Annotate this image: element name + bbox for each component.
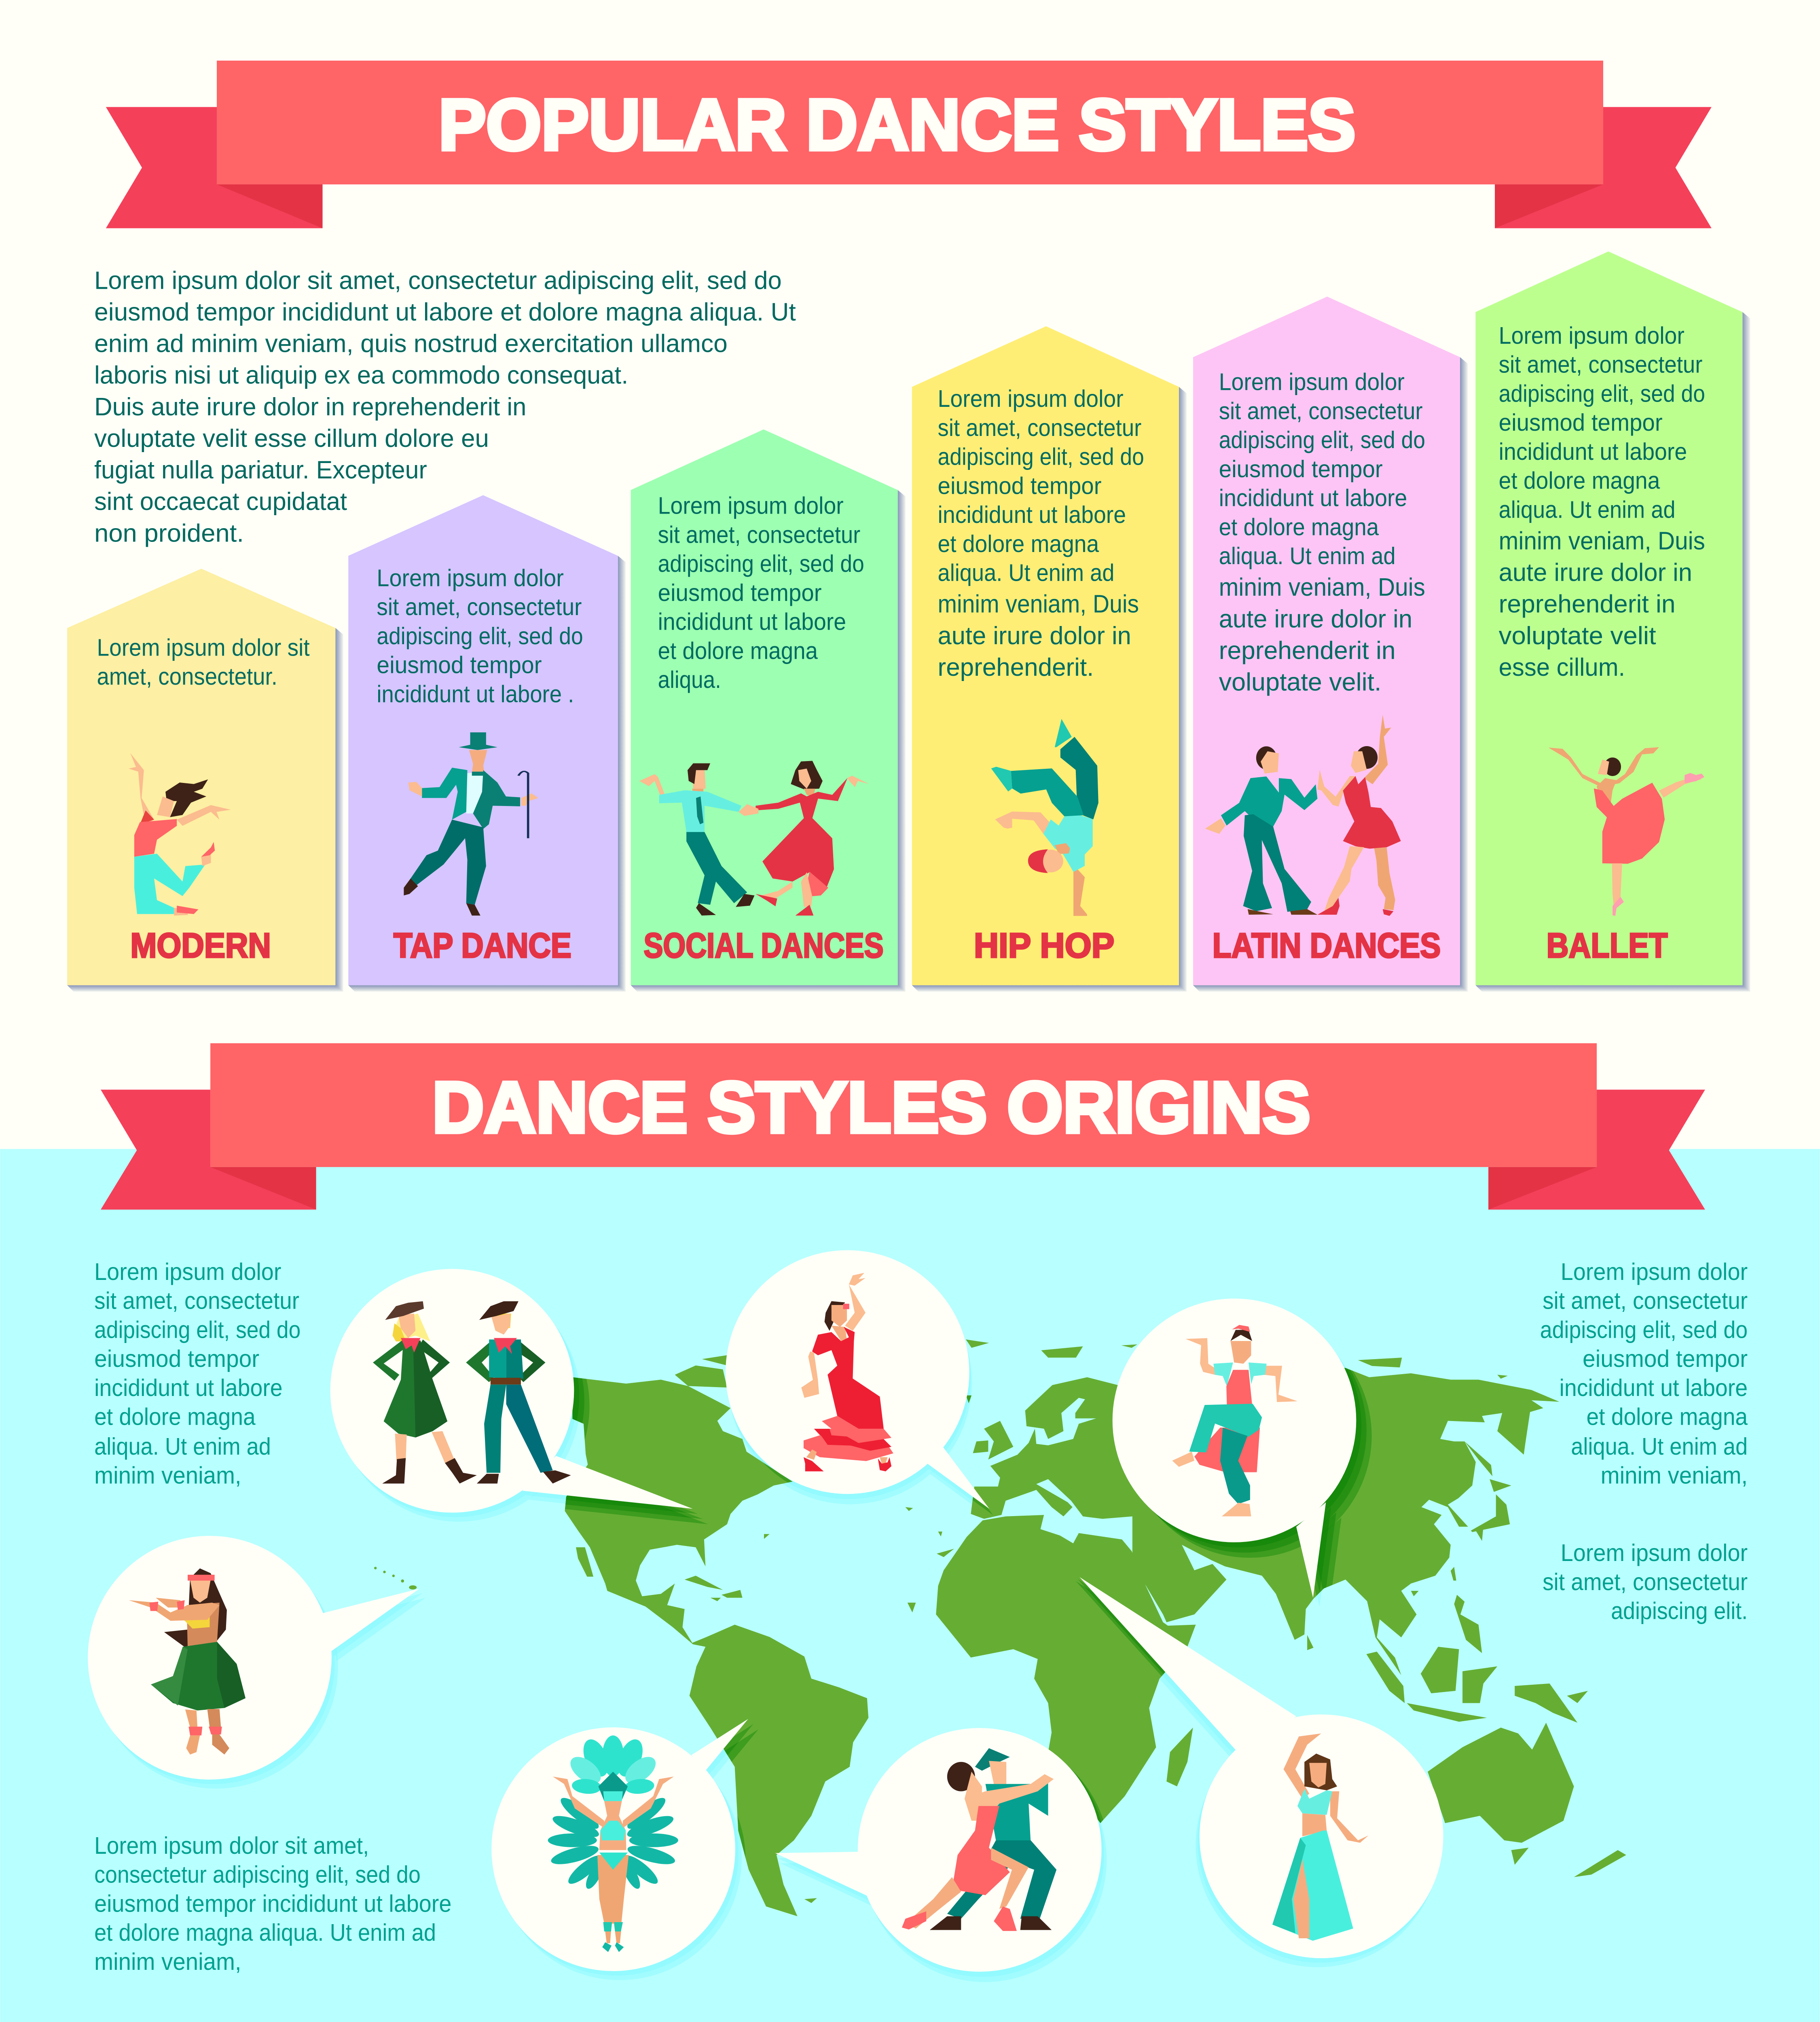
panel: ballet: minim veniam, Duis: [1499, 527, 1705, 555]
panel: social dances: eiusmod tempor: [658, 580, 822, 606]
bubble: flamenco (spain): [726, 1250, 989, 1509]
panel: social dances: [631, 429, 906, 992]
text block: upper left: incididunt ut labore: [94, 1375, 283, 1401]
panel: hip hop: reprehenderit.: [938, 654, 1094, 681]
panel: hip hop: adipiscing elit, sed do: [938, 444, 1144, 470]
intro text block: enim ad minim veniam, quis nostrud exercitation ullamco: [94, 330, 728, 358]
panel: tap dance: sit amet, consectetur: [377, 594, 582, 620]
icon: modern dancer: [129, 753, 231, 916]
panel: ballet: adipiscing elit, sed do: [1499, 380, 1705, 407]
panel: hip hop: Lorem ipsum dolor: [938, 385, 1124, 412]
text block: upper left: [94, 1258, 301, 1489]
label: BALLET: [1547, 926, 1668, 965]
lower section background: [0, 1149, 1820, 2022]
panel: modern: [67, 569, 343, 992]
text block: upper left: Lorem ipsum dolor: [94, 1258, 281, 1285]
world map: [374, 1339, 1626, 1916]
label: TAP DANCE: [394, 926, 571, 965]
panel: ballet: et dolore magna: [1499, 467, 1660, 494]
icon: tap dancer: [404, 732, 538, 916]
speech bubble shadows on the ocean: [91, 1255, 1441, 1982]
label: MODERN: [130, 926, 271, 965]
panel: latin dances: adipiscing elit, sed do: [1219, 427, 1425, 453]
title: POPULAR DANCE STYLES: [439, 84, 1356, 165]
text block: upper right: aliqua. Ut enim ad: [1571, 1433, 1748, 1460]
speech bubble shadows on the land: [335, 1256, 1441, 1982]
panel: tap dance: eiusmod tempor: [377, 652, 542, 679]
icon: social dance couple: [639, 761, 869, 916]
panel: latin dances: minim veniam, Duis: [1219, 573, 1425, 601]
intro text block: laboris nisi ut aliquip ex ea commodo consequat.: [94, 362, 628, 389]
panel: hip hop: [912, 326, 1187, 992]
panel: modern: Lorem ipsum dolor sit: [97, 634, 310, 661]
panel: social dances: incididunt ut labore: [658, 609, 846, 635]
panel: latin dances: incididunt ut labore: [1219, 485, 1407, 512]
panel: latin dances: sit amet, consectetur: [1219, 398, 1423, 424]
panel: hip hop: minim veniam, Duis: [938, 590, 1139, 618]
panel: ballet: esse cillum.: [1499, 654, 1625, 681]
icon: wing feathers: [548, 1794, 678, 1891]
label: LATIN DANCES: [1213, 926, 1441, 965]
intro text block: Duis aute irure dolor in reprehenderit in: [94, 393, 526, 421]
panel: ballet: eiusmod tempor: [1499, 409, 1663, 436]
panel: hip hop: sit amet, consectetur: [938, 415, 1141, 441]
text block: upper left: aliqua. Ut enim ad: [94, 1433, 271, 1460]
bubble: hula (hawaii): [88, 1536, 419, 1780]
panel: tap dance: [348, 495, 626, 992]
intro text block: sint occaecat cupidatat: [94, 488, 347, 516]
label: SOCIAL DANCES: [644, 926, 884, 965]
panel: hip hop: eiusmod tempor: [938, 472, 1102, 499]
text block: lower right: [1543, 1540, 1748, 1624]
panel: tap dance: incididunt ut labore .: [377, 681, 574, 707]
icon: latin dance couple: [1205, 715, 1401, 916]
text block: upper left: minim veniam,: [94, 1462, 241, 1489]
text block: lower left: et dolore magna aliqua. Ut enim ad: [94, 1919, 436, 1946]
icon: hawaiian islands: [374, 1567, 417, 1589]
intro text block: voluptate velit esse cillum dolore eu: [94, 425, 489, 453]
text block: upper left: et dolore magna: [94, 1404, 256, 1430]
panel: modern: amet, consectetur.: [97, 663, 277, 690]
text block: lower left: eiusmod tempor incididunt ut labore: [94, 1890, 451, 1917]
panel: latin dances: reprehenderit in: [1219, 637, 1396, 664]
intro text block: [94, 266, 796, 547]
panel: ballet: incididunt ut labore: [1499, 438, 1687, 465]
bubble: square dance (north america): [330, 1269, 693, 1512]
text block: lower right: Lorem ipsum dolor: [1561, 1540, 1748, 1566]
icon: headdress feathers: [566, 1735, 660, 1795]
text block: upper left: adipiscing elit, sed do: [94, 1316, 301, 1343]
panel: hip hop: aute irure dolor in: [938, 622, 1131, 650]
text block: lower right: adipiscing elit.: [1611, 1598, 1748, 1624]
panel: social dances: et dolore magna: [658, 637, 818, 664]
text block: upper right: adipiscing elit, sed do: [1540, 1316, 1748, 1343]
panel: latin dances: voluptate velit.: [1219, 668, 1381, 696]
panel: social dances: adipiscing elit, sed do: [658, 550, 864, 577]
panel: social dances: sit amet, consectetur: [658, 521, 860, 548]
text block: upper right: et dolore magna: [1587, 1404, 1748, 1430]
bubble: belly dance (middle east): [1079, 1577, 1443, 1958]
text block: lower left: consectetur adipiscing elit, sed do: [94, 1861, 421, 1888]
text block: upper right: eiusmod tempor: [1583, 1345, 1748, 1372]
panel: ballet: voluptate velit: [1499, 622, 1656, 650]
panel: latin dances: Lorem ipsum dolor: [1219, 369, 1405, 396]
icon: ballerina: [1548, 747, 1704, 916]
text block: upper right: incididunt ut labore: [1560, 1375, 1748, 1401]
text block: upper left: eiusmod tempor: [94, 1345, 259, 1372]
panel: latin dances: aliqua. Ut enim ad: [1219, 543, 1396, 569]
text block: upper right: minim veniam,: [1601, 1462, 1748, 1489]
banner: popular dance styles: [106, 61, 1712, 228]
panel: hip hop: et dolore magna: [938, 531, 1099, 557]
text block: upper right: [1540, 1258, 1748, 1489]
panel: ballet: reprehenderit in: [1499, 590, 1676, 618]
panel: social dances: Lorem ipsum dolor: [658, 493, 844, 519]
text block: lower left: minim veniam,: [94, 1948, 241, 1975]
banner: dance styles origins: [101, 1043, 1705, 1210]
panel: latin dances: [1193, 296, 1468, 992]
panel: ballet: aute irure dolor in: [1499, 559, 1692, 587]
text block: lower left: Lorem ipsum dolor sit amet,: [94, 1832, 369, 1859]
panel: hip hop: aliqua. Ut enim ad: [938, 560, 1114, 586]
text block: upper right: sit amet, consectetur: [1543, 1288, 1748, 1314]
panel: latin dances: et dolore magna: [1219, 514, 1379, 540]
panel: hip hop: incididunt ut labore: [938, 501, 1126, 528]
bubble: samba (south america): [491, 1719, 748, 1971]
intro text block: eiusmod tempor incididunt ut labore et dolore magna aliqua. Ut: [94, 298, 796, 326]
panel: tap dance: Lorem ipsum dolor: [377, 565, 564, 591]
text block: upper left: sit amet, consectetur: [94, 1288, 299, 1314]
panel: ballet: aliqua. Ut enim ad: [1499, 496, 1676, 523]
text block: upper right: Lorem ipsum dolor: [1561, 1258, 1748, 1285]
panel: ballet: sit amet, consectetur: [1499, 351, 1703, 378]
intro text block: Lorem ipsum dolor sit amet, consectetur adipiscing elit, sed do: [94, 266, 782, 294]
panel: latin dances: aute irure dolor in: [1219, 605, 1412, 633]
panel: ballet: [1475, 252, 1750, 992]
bubble: indian dance: [1113, 1299, 1356, 1598]
panel: tap dance: adipiscing elit, sed do: [377, 623, 583, 649]
panel: latin dances: eiusmod tempor: [1219, 456, 1383, 482]
label: HIP HOP: [974, 926, 1114, 965]
icon: hip hop dancer: [991, 719, 1098, 916]
title: DANCE STYLES ORIGINS: [432, 1067, 1310, 1148]
panel: social dances: aliqua.: [658, 666, 721, 693]
intro text block: fugiat nulla pariatur. Excepteur: [94, 456, 427, 484]
intro text block: non proident.: [94, 519, 244, 547]
text block: lower left: [94, 1832, 451, 1975]
panel: ballet: Lorem ipsum dolor: [1499, 322, 1685, 349]
text block: lower right: sit amet, consectetur: [1543, 1569, 1748, 1595]
bubble: tango (argentina): [775, 1728, 1102, 1972]
